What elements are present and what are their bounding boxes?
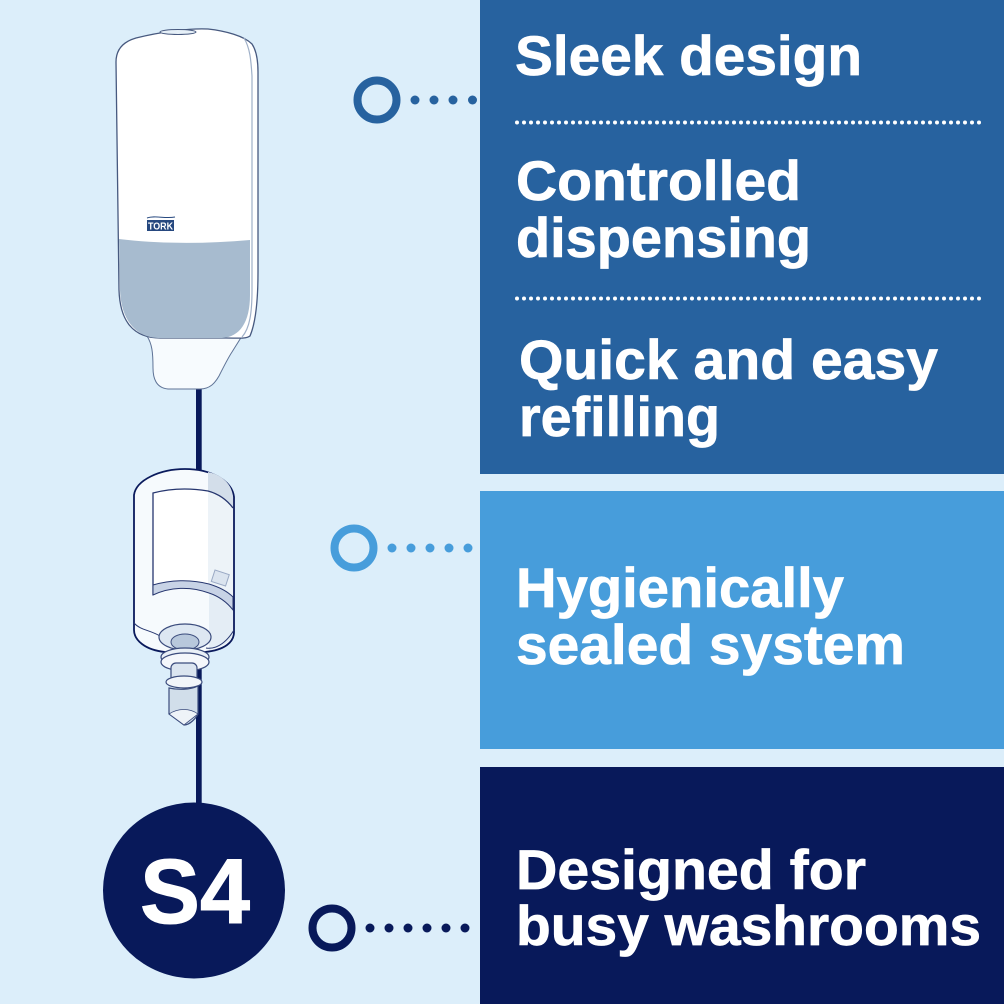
callout marker: dark blue ring and dots bbox=[358, 80, 477, 120]
Tork logo: TORK bbox=[148, 222, 174, 232]
Tork logo bbox=[147, 217, 175, 232]
heading: Designed for busy washrooms: Designed for bbox=[516, 838, 866, 901]
heading: Sleek design: Sleek design bbox=[515, 24, 862, 87]
refill window bbox=[119, 239, 250, 338]
badge: S4: S4 bbox=[140, 841, 250, 943]
dispenser body bbox=[116, 29, 258, 338]
dispenser side edge bbox=[242, 38, 252, 337]
heading: Designed for busy washrooms: busy washrooms bbox=[516, 894, 981, 957]
heading: Quick and easy refilling: Quick and easy bbox=[519, 328, 938, 391]
heading: Quick and easy refilling: refilling bbox=[519, 385, 720, 448]
cartridge shoulder shade bbox=[208, 472, 233, 508]
heading: Controlled dispensing: Controlled bbox=[516, 149, 801, 212]
heading: Controlled dispensing: dispensing bbox=[516, 206, 811, 269]
cartridge neck bbox=[159, 624, 211, 650]
badge: S4 bbox=[103, 802, 285, 978]
cartridge body bbox=[134, 469, 234, 652]
panel: dark blue features bbox=[480, 0, 1004, 474]
callout marker: navy ring and dots bbox=[312, 908, 470, 948]
heading: Hygienically sealed system: Hygienically bbox=[516, 556, 844, 619]
heading: Controlled dispensing bbox=[516, 149, 811, 269]
dispenser nozzle bbox=[147, 336, 242, 389]
label lower band bbox=[153, 581, 233, 610]
side logo bbox=[211, 570, 229, 586]
heading: Hygienically sealed system: sealed system bbox=[516, 613, 905, 676]
panel: light blue hygiene bbox=[480, 491, 1004, 749]
nozzle tip bbox=[169, 686, 198, 725]
cartridge right shade bbox=[209, 496, 233, 650]
heading: Hygienically sealed system bbox=[516, 556, 905, 676]
refill base line bbox=[134, 623, 234, 648]
callout marker: light blue ring and dots bbox=[334, 528, 472, 568]
heading: Designed for busy washrooms bbox=[516, 838, 981, 957]
divider dots: upper bbox=[517, 120, 986, 124]
panel: navy washrooms bbox=[480, 767, 1004, 1004]
illustration: wall dispenser bbox=[116, 29, 258, 389]
illustration: refill cartridge bbox=[134, 469, 234, 725]
divider dots: lower bbox=[517, 296, 986, 300]
connector line: dispenser to S4 badge bbox=[196, 385, 202, 810]
label white panel bbox=[153, 489, 233, 597]
top button bbox=[160, 30, 196, 34]
nozzle stem bbox=[171, 663, 197, 683]
heading: Quick and easy refilling bbox=[519, 328, 938, 448]
